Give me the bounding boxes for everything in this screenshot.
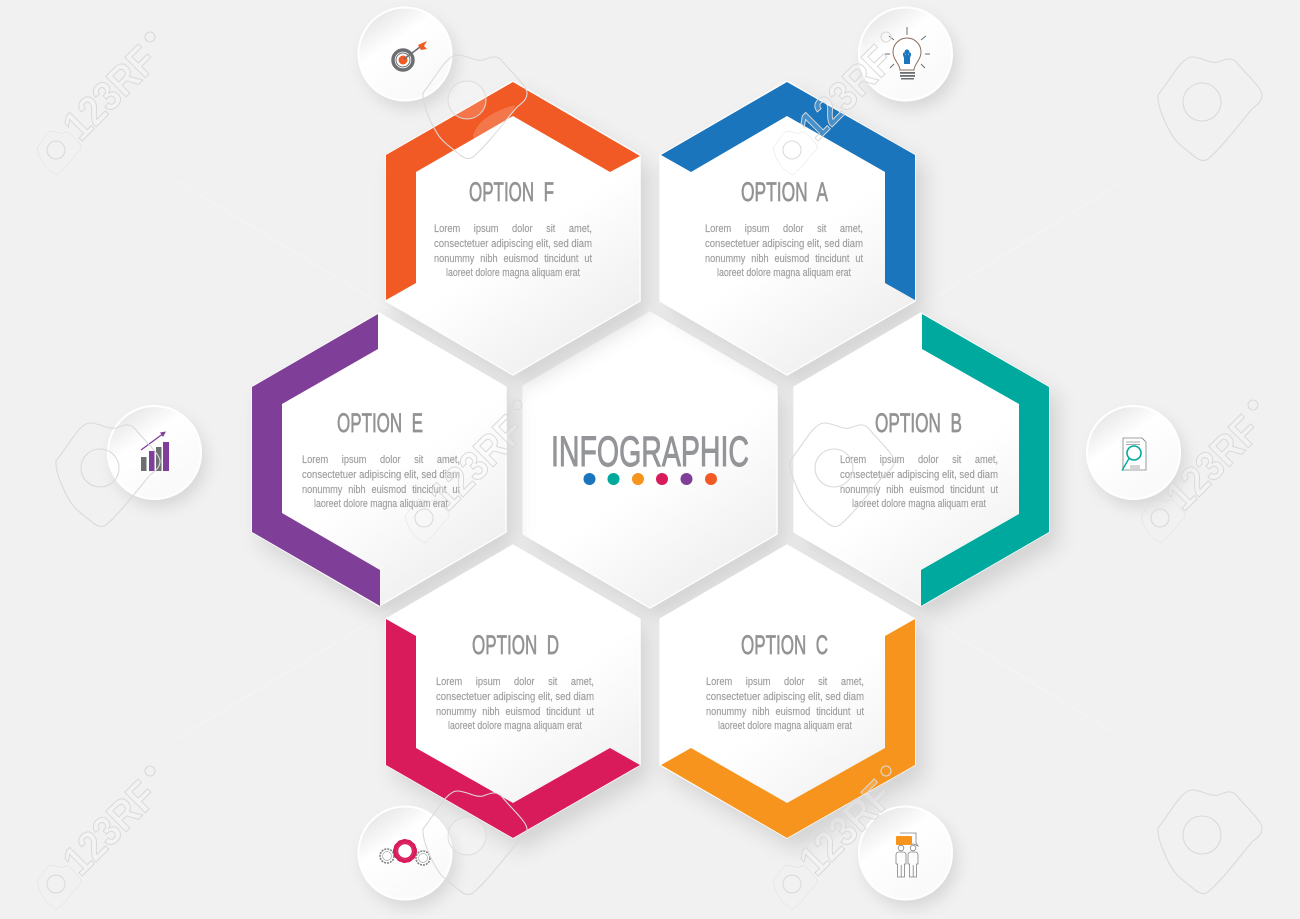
panel: center hexagon bbox=[523, 312, 777, 608]
panel: option E bbox=[252, 313, 506, 606]
body text: Lorem ipsum dolor sit amet, bbox=[705, 223, 863, 235]
heading: infographic: INFOGRAPHIC bbox=[551, 428, 749, 476]
watermark: 123RF top centre right: 123RF bbox=[790, 37, 902, 149]
body text bbox=[840, 454, 998, 510]
body text: consectetuer adipiscing elit, sed diam bbox=[706, 691, 864, 703]
body text: nonummy nibh euismod tincidunt ut bbox=[706, 706, 864, 718]
icon: lightbulb bbox=[885, 27, 930, 80]
title: option B: OPTION B bbox=[875, 408, 962, 438]
icon: two people with speech bubble bbox=[896, 833, 918, 877]
title: option E: OPTION E bbox=[337, 408, 423, 438]
watermark: large stamp bottom centre bbox=[423, 791, 527, 894]
body text: nonummy nibh euismod tincidunt ut bbox=[436, 706, 594, 718]
band: purple bbox=[252, 314, 380, 606]
body text: laoreet dolore magna aliquam erat bbox=[446, 267, 580, 279]
body text bbox=[302, 454, 460, 510]
body text bbox=[706, 676, 864, 732]
badge: lightbulb bbox=[859, 8, 952, 100]
watermark: 123RF bottom left bbox=[37, 766, 166, 909]
watermark: 123RF bottom centre right: 123RF bbox=[790, 772, 902, 884]
watermark: 123RF centre left: 123RF bbox=[421, 407, 533, 519]
title: option D: OPTION D bbox=[472, 630, 559, 660]
body text: Lorem ipsum dolor sit amet, bbox=[434, 223, 592, 235]
body text: laoreet dolore magna aliquam erat bbox=[718, 720, 852, 732]
body text: consectetuer adipiscing elit, sed diam bbox=[705, 238, 863, 250]
watermark: 123RF far right: 123RF bbox=[1157, 407, 1269, 519]
body text: laoreet dolore magna aliquam erat bbox=[852, 498, 986, 510]
watermark: 123RF top left bbox=[37, 32, 166, 175]
body text: Lorem ipsum dolor sit amet, bbox=[706, 676, 864, 688]
badge: people talking bbox=[859, 806, 952, 900]
body text: laoreet dolore magna aliquam erat bbox=[448, 720, 582, 732]
colour dots bbox=[584, 473, 717, 485]
body text bbox=[434, 223, 592, 279]
band: amber bbox=[661, 619, 915, 838]
icon: bar chart with arrow bbox=[141, 432, 169, 471]
watermark: large stamp bottom right bbox=[1158, 790, 1262, 893]
title: option F: OPTION F bbox=[469, 177, 554, 207]
body text: nonummy nibh euismod tincidunt ut bbox=[302, 484, 460, 496]
watermark: 123RF top left: 123RF bbox=[54, 37, 166, 149]
body text: laoreet dolore magna aliquam erat bbox=[314, 498, 448, 510]
panel: option C bbox=[660, 545, 915, 838]
watermark: large stamp top centre bbox=[423, 55, 527, 158]
body text: laoreet dolore magna aliquam erat bbox=[717, 267, 851, 279]
body text: Lorem ipsum dolor sit amet, bbox=[436, 676, 594, 688]
panel: option D bbox=[386, 545, 640, 838]
badge: document search bbox=[1087, 406, 1180, 499]
title: option A: OPTION A bbox=[741, 177, 828, 207]
band: teal bbox=[921, 314, 1049, 606]
badge: target bbox=[358, 8, 452, 100]
badge: growth chart bbox=[108, 406, 201, 499]
body text: nonummy nibh euismod tincidunt ut bbox=[434, 253, 592, 265]
body text: consectetuer adipiscing elit, sed diam bbox=[434, 238, 592, 250]
body text: consectetuer adipiscing elit, sed diam bbox=[436, 691, 594, 703]
watermark: large stamp top right bbox=[1158, 57, 1262, 160]
watermark: 123RF top centre right bbox=[773, 32, 902, 175]
body text bbox=[436, 676, 594, 732]
icon: document with magnifier bbox=[1122, 438, 1146, 470]
watermark: large stamp centre right bbox=[790, 423, 894, 526]
watermark: large stamp left bbox=[56, 423, 160, 526]
band: blue bbox=[661, 82, 915, 300]
panel: option A bbox=[660, 81, 915, 375]
badge: gears bbox=[358, 806, 452, 900]
body text: consectetuer adipiscing elit, sed diam bbox=[840, 469, 998, 481]
body text: nonummy nibh euismod tincidunt ut bbox=[840, 484, 998, 496]
title: option C: OPTION C bbox=[741, 630, 828, 660]
body text: consectetuer adipiscing elit, sed diam bbox=[302, 469, 460, 481]
body text bbox=[705, 223, 863, 279]
panel: option B bbox=[794, 313, 1049, 606]
icon: target bbox=[393, 41, 427, 70]
body text: Lorem ipsum dolor sit amet, bbox=[840, 454, 998, 466]
watermark: 123RF bottom left: 123RF bbox=[54, 772, 166, 884]
watermark: 123RF bottom centre right bbox=[773, 766, 902, 909]
band: crimson bbox=[386, 619, 640, 838]
panel: option F bbox=[386, 81, 640, 375]
icon: gears bbox=[380, 840, 430, 865]
watermark: 123RF far right bbox=[1141, 400, 1269, 543]
body text: nonummy nibh euismod tincidunt ut bbox=[705, 253, 863, 265]
watermark: 123RF centre left bbox=[405, 400, 533, 543]
body text: Lorem ipsum dolor sit amet, bbox=[302, 454, 460, 466]
band: orange-red bbox=[386, 82, 640, 300]
